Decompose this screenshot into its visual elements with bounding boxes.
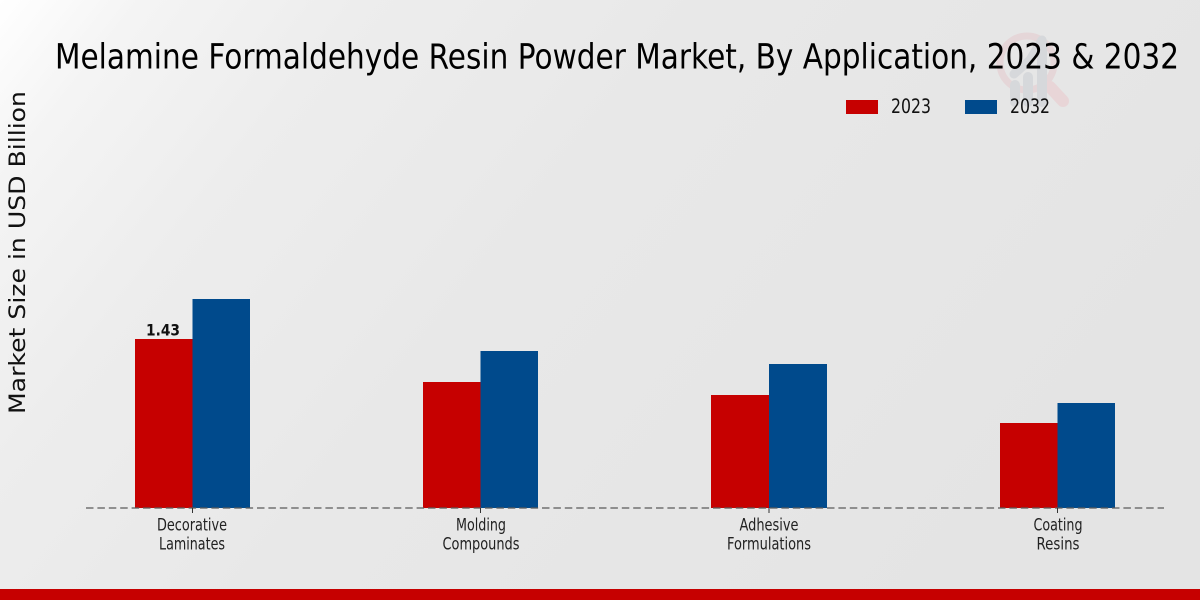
footer bar xyxy=(0,589,1200,600)
bar chart xyxy=(86,299,1164,554)
legend label: 2023: 2023 xyxy=(891,95,931,118)
value label: 1.43: 1.43 xyxy=(146,320,180,340)
x label: Coating Resins: Resins xyxy=(1036,534,1080,554)
x axis baseline xyxy=(86,507,1164,509)
x label: Adhesive Formulations: Adhesive xyxy=(740,516,798,534)
x label: Molding Compounds: Molding xyxy=(456,516,506,534)
y axis label: Market Size in USD Billion xyxy=(5,91,31,414)
icon: watermark logo xyxy=(1000,36,1063,102)
x label: Decorative Laminates: Decorative xyxy=(157,516,227,534)
x label: Decorative Laminates: Laminates xyxy=(159,534,225,554)
legend swatch: 2023 xyxy=(846,100,878,114)
legend swatch: 2032 xyxy=(965,100,997,114)
bars: Adhesive Formulations xyxy=(711,364,827,508)
bars: Decorative Laminates xyxy=(135,299,250,508)
bars: Molding Compounds xyxy=(423,351,538,508)
legend label: 2032: 2032 xyxy=(1010,95,1050,118)
legend xyxy=(846,95,1050,118)
x label: Coating Resins: Coating xyxy=(1034,516,1082,534)
x label: Adhesive Formulations: Formulations xyxy=(727,534,811,554)
x label: Molding Compounds: Compounds xyxy=(442,534,520,554)
bars: Coating Resins xyxy=(1000,403,1115,508)
